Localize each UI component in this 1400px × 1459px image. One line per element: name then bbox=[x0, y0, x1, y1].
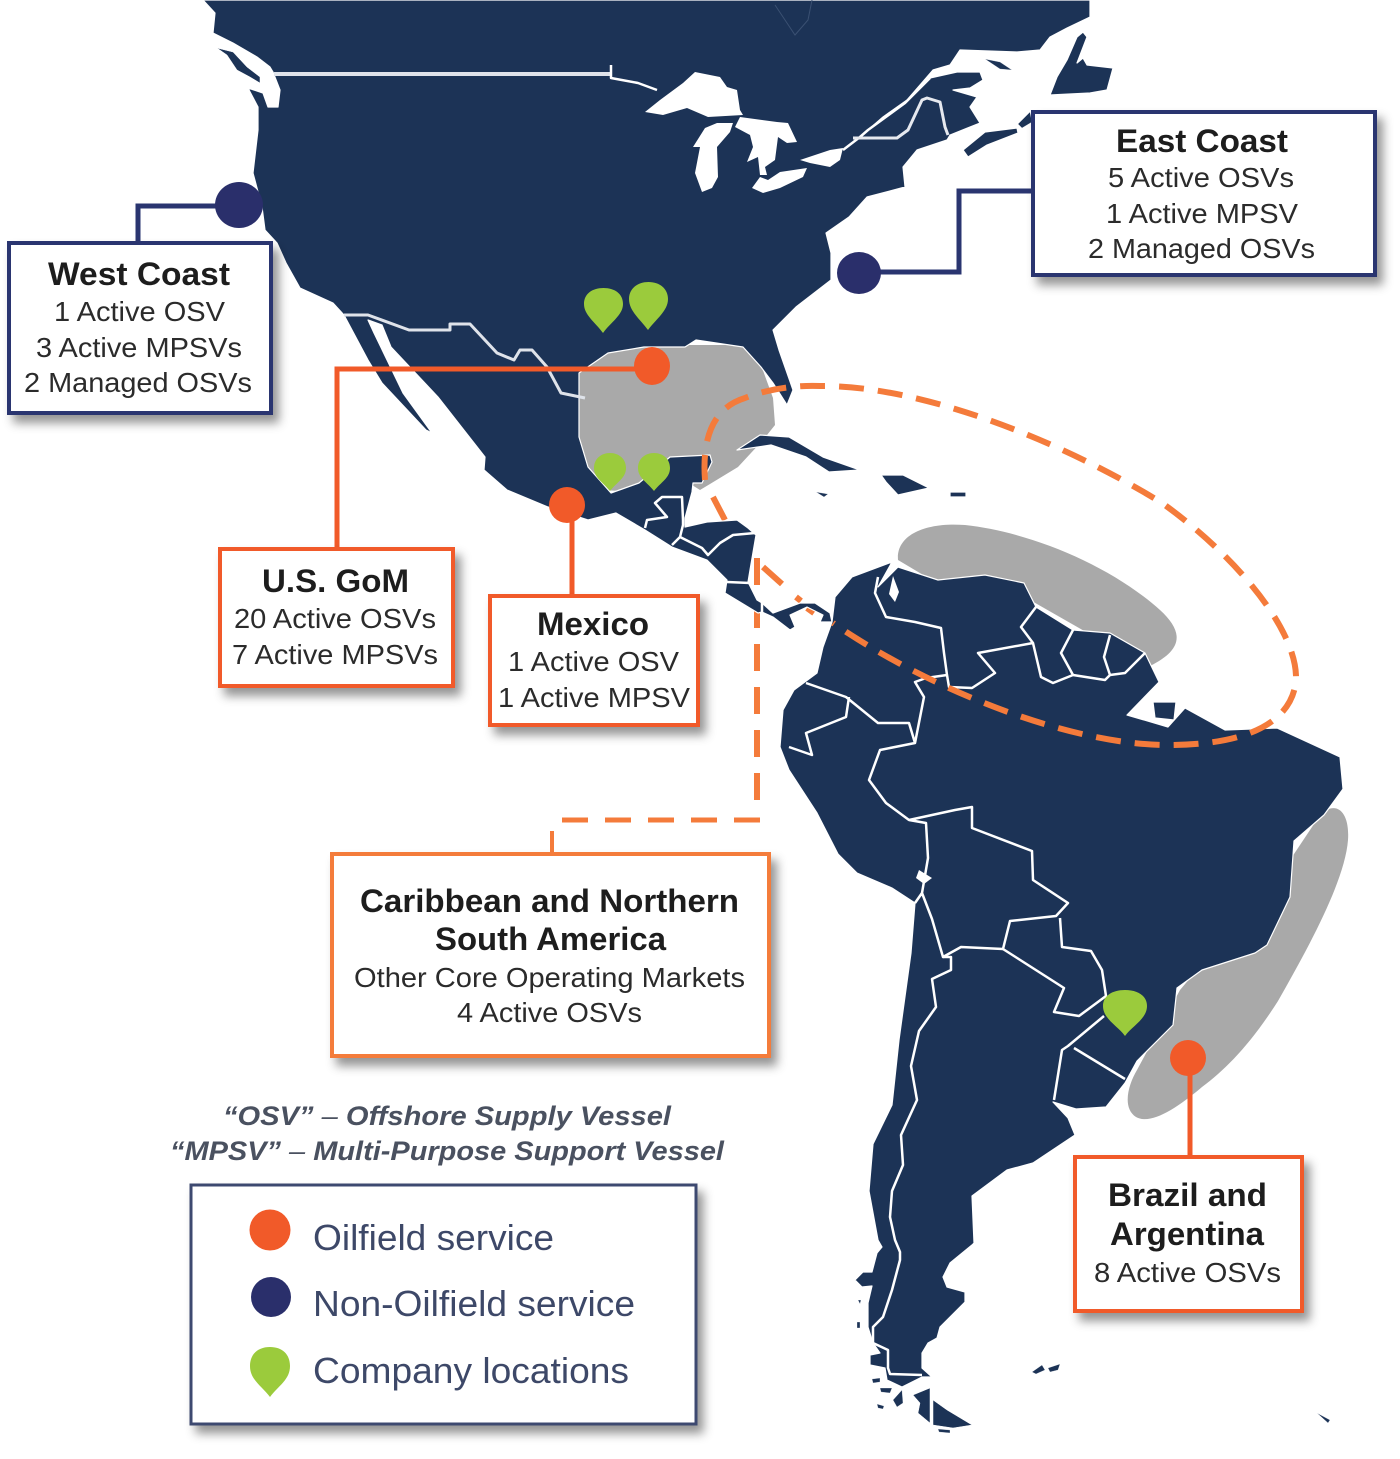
callout: Brazil and Argentina: Argentina bbox=[1110, 1216, 1264, 1252]
pin: Mexico location 2 bbox=[638, 453, 670, 491]
glossary notes: “OSV” – Offshore Supply Vessel bbox=[223, 1101, 672, 1131]
legend: oilfield service: Oilfield service bbox=[313, 1217, 554, 1258]
shaded region: Brazil and Argentina coast bbox=[1128, 808, 1348, 1119]
glossary notes: “MPSV” – Multi-Purpose Support Vessel bbox=[170, 1136, 725, 1166]
dashed ellipse: section behind Central America bbox=[713, 497, 814, 613]
connector: Brazil and Argentina bbox=[1188, 1070, 1192, 1159]
land: Amazon delta island bbox=[1153, 702, 1176, 720]
land: Tierra del Fuego east bbox=[933, 1400, 972, 1428]
glossary notes bbox=[170, 1101, 725, 1166]
callout: Brazil and Argentina bbox=[1075, 1157, 1302, 1311]
land: South Georgia bbox=[1317, 1413, 1330, 1423]
callout: East Coast bbox=[1033, 112, 1375, 275]
land: North and Central America bbox=[203, 0, 1090, 630]
callout: West Coast: 1 Active OSV bbox=[54, 296, 225, 327]
land: Falkland Islands bbox=[1032, 1364, 1060, 1374]
callout: West Coast: 2 Managed OSVs bbox=[24, 367, 252, 398]
legend: company locations bbox=[250, 1347, 629, 1397]
pin: Brazil location bbox=[1103, 990, 1147, 1036]
callout: Brazil and Argentina: Brazil and bbox=[1108, 1177, 1267, 1213]
connector: Mexico bbox=[570, 515, 574, 598]
callout: Caribbean and Northern South America: Other Core Operating Markets bbox=[354, 962, 745, 993]
land: Newfoundland bbox=[1050, 32, 1113, 95]
Great Lakes bbox=[645, 72, 843, 193]
callout: West Coast: West Coast bbox=[48, 256, 230, 292]
callout: Caribbean and Northern South America bbox=[332, 854, 769, 1056]
callout: Mexico bbox=[490, 596, 698, 725]
marker: Mexico oilfield bbox=[549, 487, 585, 523]
shaded region: Gulf of Mexico bbox=[579, 345, 775, 492]
callout: Caribbean and Northern South America: Caribbean and Northern bbox=[360, 883, 739, 919]
legend bbox=[191, 1185, 696, 1424]
land: Jamaica bbox=[816, 492, 828, 497]
callout: U.S. GoM bbox=[220, 549, 453, 686]
marker: East Coast non-oilfield bbox=[837, 252, 881, 294]
land: Cape Breton bbox=[1018, 112, 1032, 128]
callout: East Coast: 1 Active MPSV bbox=[1106, 198, 1298, 229]
dashed leader: vertical run behind Central America bbox=[754, 558, 760, 800]
land: Anticosti Island bbox=[985, 59, 1012, 70]
callout: U.S. GoM: 7 Active MPSVs bbox=[232, 639, 438, 670]
land: Hispaniola bbox=[881, 475, 929, 495]
connector: Caribbean dashed leader bbox=[559, 818, 760, 822]
connector: Caribbean box stem bbox=[550, 831, 554, 856]
pin: Mexico location 1 bbox=[594, 453, 626, 491]
marker: Brazil oilfield bbox=[1170, 1040, 1206, 1076]
legend: company locations: Company locations bbox=[313, 1350, 629, 1391]
pin: Texas location 2 bbox=[629, 282, 668, 330]
shaded region: northern South America bbox=[898, 525, 1177, 666]
callout: Mexico: 1 Active MPSV bbox=[498, 682, 690, 713]
callout: West Coast bbox=[9, 243, 271, 413]
land: Vancouver Island bbox=[217, 48, 260, 83]
dashed ellipse: Caribbean region bbox=[704, 386, 1296, 745]
legend: non-oilfield service: Non-Oilfield service bbox=[313, 1283, 635, 1324]
land: Nova Scotia bbox=[963, 128, 1018, 157]
land: Cuba bbox=[737, 435, 860, 472]
country borders bbox=[274, 0, 1145, 1375]
connector: East Coast bbox=[878, 191, 1034, 272]
callout: East Coast: East Coast bbox=[1116, 123, 1288, 159]
callout: Brazil and Argentina: 8 Active OSVs bbox=[1094, 1257, 1281, 1288]
callout: Mexico: 1 Active OSV bbox=[508, 646, 679, 677]
callout: West Coast: 3 Active MPSVs bbox=[36, 332, 242, 363]
callout: East Coast: 2 Managed OSVs bbox=[1088, 233, 1315, 264]
callout: East Coast: 5 Active OSVs bbox=[1108, 162, 1294, 193]
marker: U.S. GoM oilfield bbox=[634, 347, 670, 385]
land: South America bbox=[780, 562, 1343, 1387]
callout: Caribbean and Northern South America: South America bbox=[435, 921, 666, 957]
legend: oilfield service bbox=[250, 1210, 554, 1258]
callout: U.S. GoM: 20 Active OSVs bbox=[234, 603, 436, 634]
marker: West Coast non-oilfield bbox=[215, 182, 263, 228]
callout: U.S. GoM: U.S. GoM bbox=[262, 563, 409, 599]
pin: Texas location 1 bbox=[584, 288, 623, 333]
land: Tierra del Fuego west bbox=[913, 1388, 930, 1423]
Lake Maracaibo and Titicaca bbox=[889, 576, 932, 884]
callout: Mexico: Mexico bbox=[537, 606, 649, 642]
connector: U.S. GoM bbox=[337, 369, 642, 551]
callout: Caribbean and Northern South America: 4 Active OSVs bbox=[457, 997, 642, 1028]
land: southern islands bbox=[857, 1300, 950, 1433]
land: Puerto Rico bbox=[950, 492, 966, 497]
connector: West Coast bbox=[138, 206, 222, 244]
